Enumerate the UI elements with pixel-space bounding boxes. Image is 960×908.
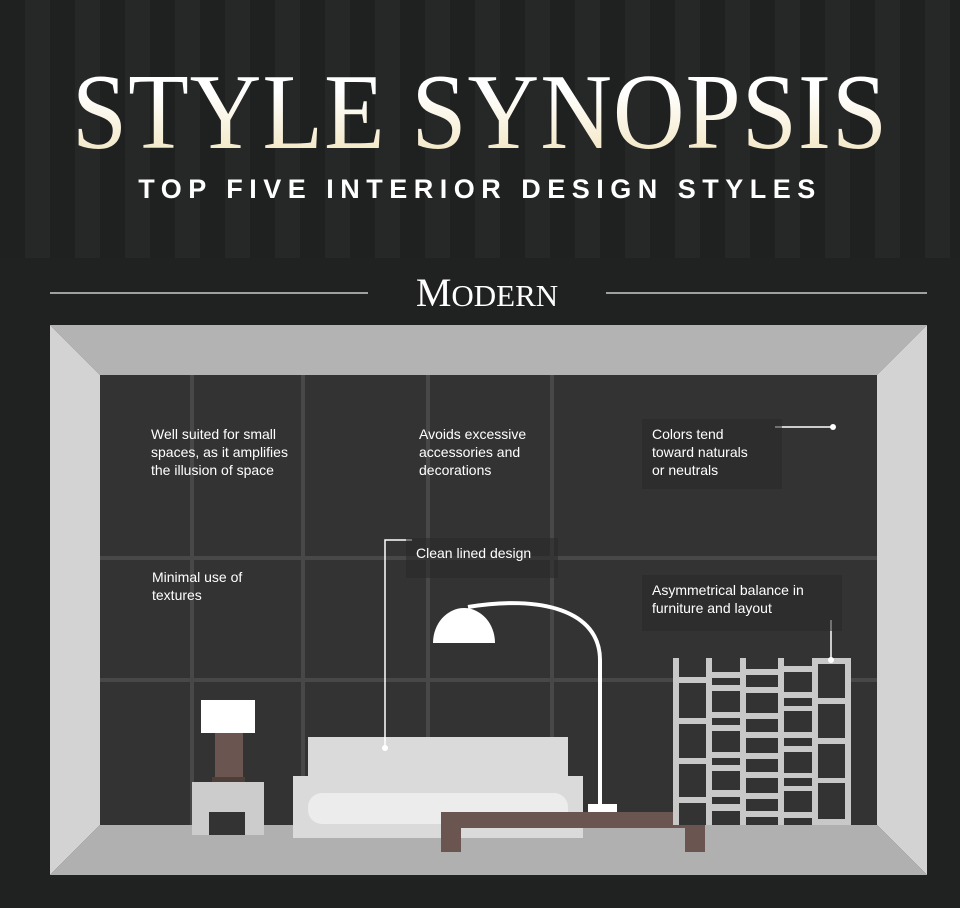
callout: textures bbox=[152, 569, 242, 603]
callout: colors: or neutrals bbox=[652, 462, 718, 478]
icon: table lamp and side table bbox=[192, 700, 264, 835]
callout: clean lined: Clean lined design bbox=[416, 545, 531, 561]
callout: small spaces: the illusion of space bbox=[151, 462, 274, 478]
callout: small spaces bbox=[151, 426, 288, 478]
icon: coffee table bbox=[441, 812, 705, 852]
callout: asymmetrical: furniture and layout bbox=[652, 600, 772, 616]
callout: clean lined bbox=[406, 538, 558, 578]
callout: colors: Colors tend bbox=[652, 426, 724, 442]
icon: floor lamp bbox=[433, 603, 617, 813]
title: STYLE SYNOPSIS bbox=[72, 53, 888, 172]
callout: accessories bbox=[419, 426, 526, 478]
callout: accessories: Avoids excessive bbox=[419, 426, 526, 442]
callout: accessories: accessories and bbox=[419, 444, 520, 460]
icon: bookshelf bbox=[673, 658, 851, 825]
callout: small spaces: Well suited for small bbox=[151, 426, 276, 442]
callout: accessories: decorations bbox=[419, 462, 491, 478]
callout: textures: Minimal use of bbox=[152, 569, 242, 585]
callout connector: clean lined bbox=[382, 540, 412, 751]
header band bbox=[0, 0, 960, 258]
callout: colors: toward naturals bbox=[652, 444, 748, 460]
callout connector: colors bbox=[775, 424, 836, 430]
subtitle: TOP FIVE INTERIOR DESIGN STYLES bbox=[138, 174, 822, 204]
callout connector: asymmetrical bbox=[828, 620, 834, 663]
callout: textures: textures bbox=[152, 587, 202, 603]
callout: small spaces: spaces, as it amplifies bbox=[151, 444, 288, 460]
callout: asymmetrical: Asymmetrical balance in bbox=[652, 582, 804, 598]
callout: asymmetrical bbox=[642, 575, 842, 631]
icon: sofa bbox=[293, 737, 583, 838]
section heading: Modern: MODERN bbox=[416, 270, 558, 315]
callout: colors bbox=[642, 419, 782, 489]
